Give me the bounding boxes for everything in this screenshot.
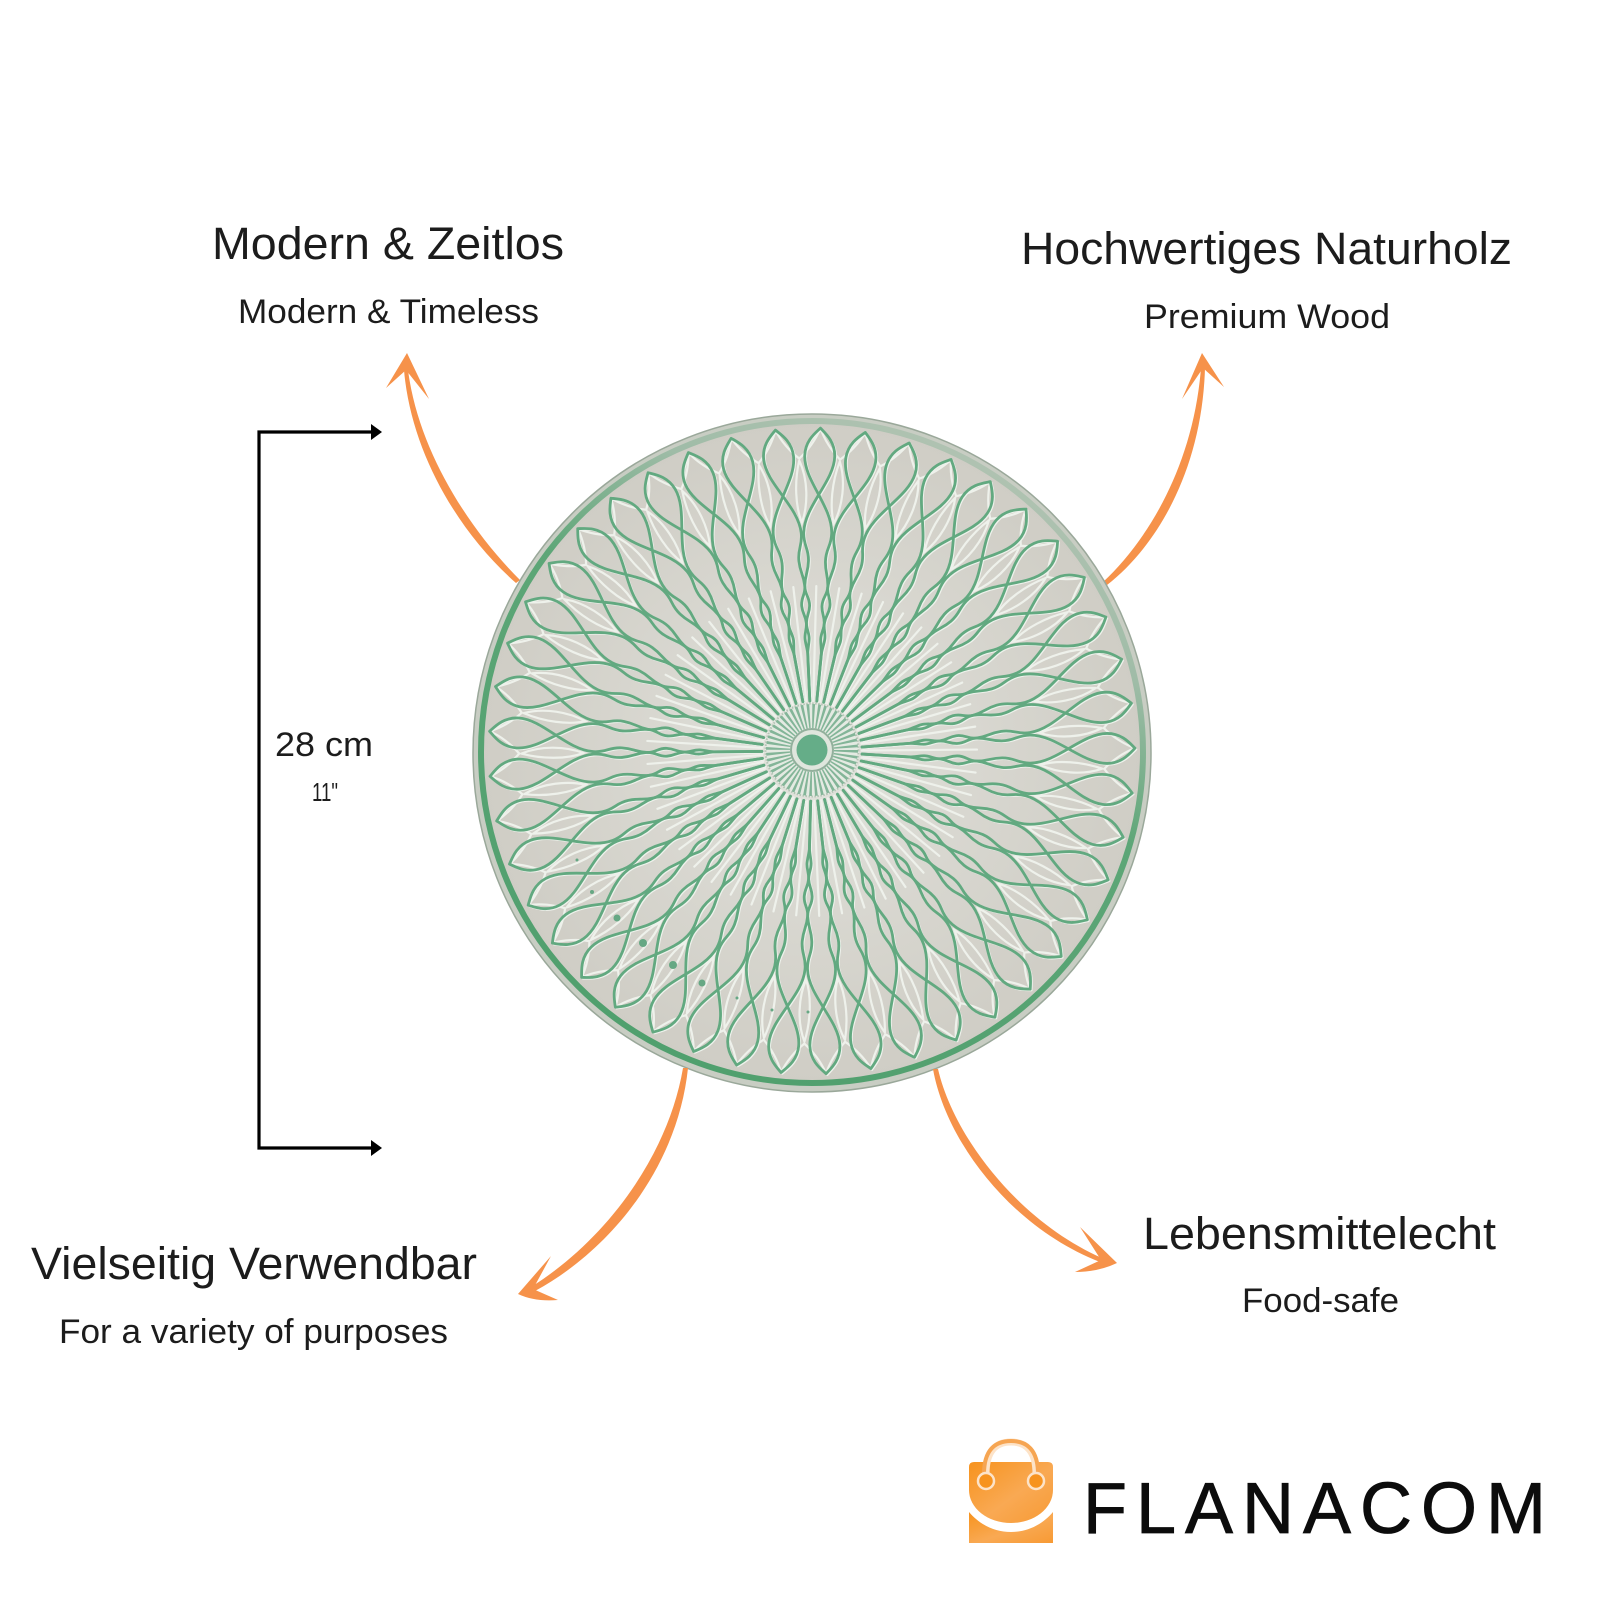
subheading: Food-safe: Food-safe — [1242, 1282, 1399, 1320]
heading: Lebensmittelecht: Lebensmittelecht — [1143, 1208, 1497, 1259]
arrow: top right, plate to Hochwertiges Naturholz — [1103, 353, 1224, 585]
dimension label: 28 cm / 11" — [275, 726, 373, 807]
heading: Hochwertiges Naturholz: Hochwertiges Naturholz — [1021, 223, 1512, 274]
petal pattern — [488, 427, 1136, 1076]
subheading: For a variety of purposes: For a variety of purposes — [59, 1313, 448, 1351]
wordmark: FLANACOM — [1083, 1469, 1546, 1549]
text block: Hochwertiges Naturholz — [1021, 223, 1512, 336]
text block: Lebensmittelecht — [1143, 1208, 1497, 1320]
arrow: bottom left, plate to Vielseitig Verwendbar — [518, 1068, 688, 1300]
icon: shopping bag — [969, 1441, 1053, 1543]
text block: Modern & Zeitlos — [212, 218, 564, 331]
small lens marks — [576, 858, 810, 1014]
size in centimetres: 28 cm — [275, 726, 373, 764]
arrow: bottom right, plate to Lebensmittelecht — [933, 1069, 1117, 1272]
subheading: Premium Wood: Premium Wood — [1144, 298, 1390, 336]
dimension bracket — [259, 424, 382, 1156]
decorative plate with petal pattern — [473, 414, 1151, 1092]
logo: Flanacom — [969, 1441, 1546, 1549]
centre medallion — [765, 703, 859, 797]
heading: Vielseitig Verwendbar: Vielseitig Verwendbar — [31, 1238, 477, 1289]
heading: Modern & Zeitlos: Modern & Zeitlos — [212, 218, 564, 269]
arrow: top left, plate to Modern & Zeitlos — [386, 353, 520, 583]
size in inches: 11" — [312, 777, 338, 807]
subheading: Modern & Timeless: Modern & Timeless — [238, 293, 539, 331]
text block: Vielseitig Verwendbar — [31, 1238, 477, 1351]
